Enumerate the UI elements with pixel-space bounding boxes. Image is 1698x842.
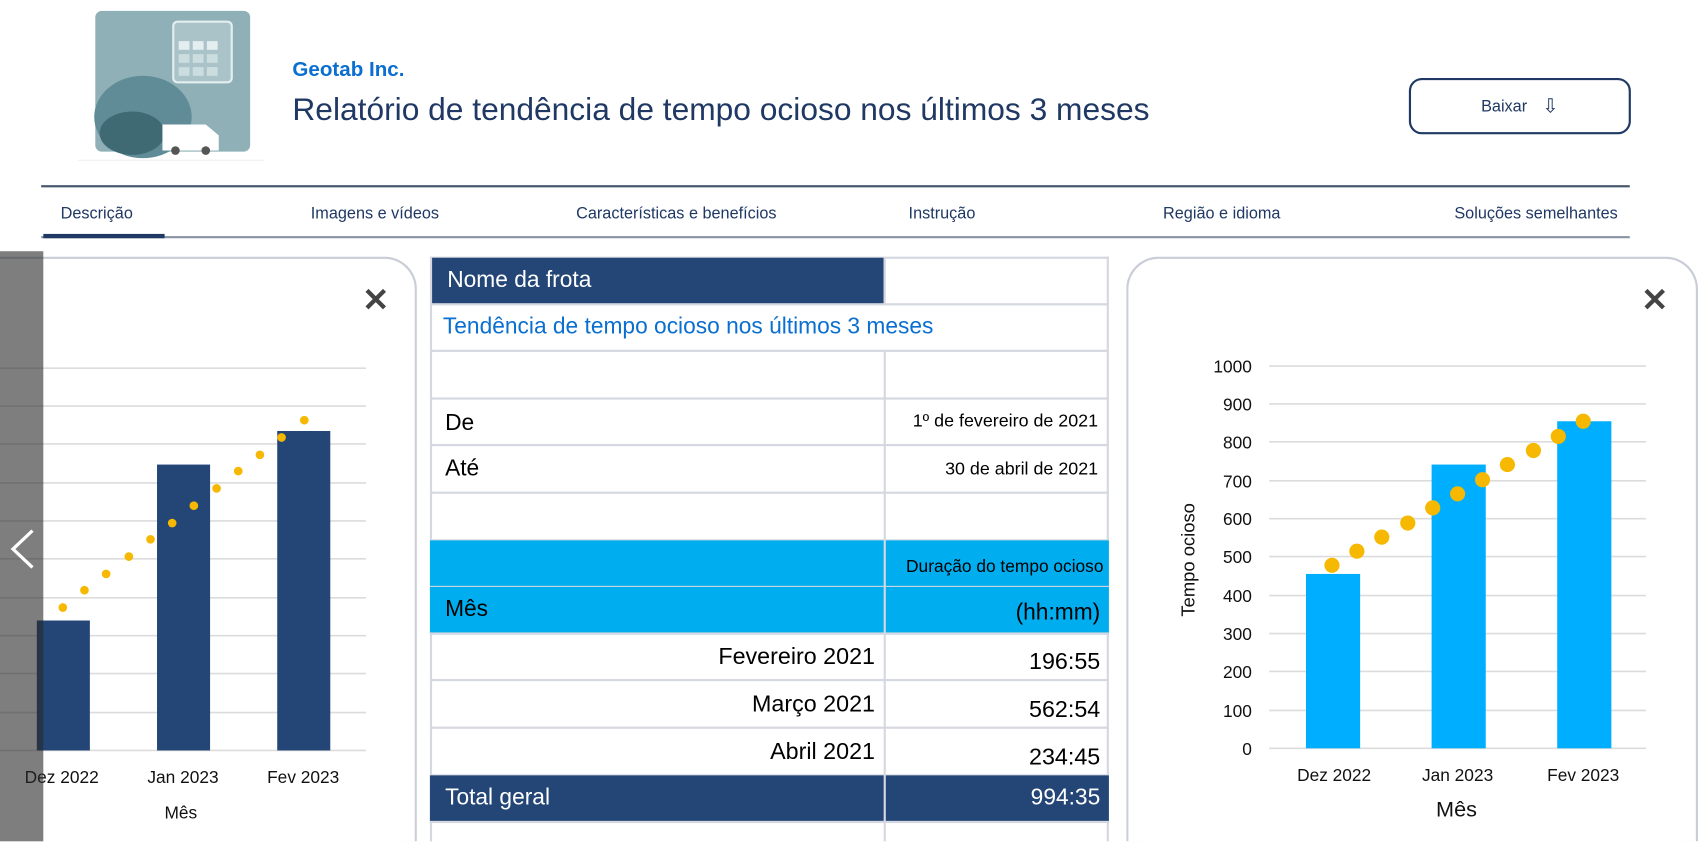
text: 562:54 [1029, 696, 1100, 722]
text: Mês [445, 597, 488, 622]
panel: right chart: 300 [1223, 624, 1252, 644]
panel: left chart [0, 257, 417, 841]
text: 196:55 [1029, 648, 1100, 674]
panel: left chart: Jan 2023 [147, 767, 219, 787]
text: Total geral [445, 785, 550, 810]
text: Março 2021 [752, 690, 875, 716]
panel: right chart: 900 [1223, 394, 1252, 414]
tabs: Características e benefícios [576, 205, 777, 223]
panel: right chart: 500 [1223, 547, 1252, 567]
tabs: Instrução [909, 205, 975, 223]
text: Fevereiro 2021 [718, 643, 875, 669]
table [430, 257, 1109, 841]
panel: right chart: 0 [1242, 739, 1252, 759]
text: 1º de fevereiro de 2021 [913, 411, 1098, 430]
tabs: Descrição [61, 205, 133, 223]
panel: right chart: 200 [1223, 662, 1252, 682]
text: Até [445, 456, 479, 481]
text: (hh:mm) [1016, 600, 1100, 625]
panel: right chart: 400 [1223, 586, 1252, 606]
text: 30 de abril de 2021 [945, 459, 1098, 478]
panel: left chart: ✕ [362, 282, 389, 318]
panel: right chart: 100 [1223, 701, 1252, 721]
panel: right chart: Mês [1436, 797, 1477, 822]
tabs: Imagens e vídeos [311, 205, 439, 223]
scroll arrow overlay [0, 251, 43, 841]
panel: right chart: 600 [1223, 509, 1252, 529]
logo [78, 10, 264, 161]
panel: right chart [1126, 257, 1698, 841]
panel: left chart: Mês [164, 803, 198, 823]
text: De [445, 410, 474, 435]
panel: right chart: ✕ [1641, 282, 1668, 318]
company name: Geotab Inc. [292, 58, 404, 81]
panel: right chart: 1000 [1213, 357, 1252, 377]
panel: right chart: Jan 2023 [1422, 765, 1493, 785]
tabs [41, 205, 1630, 238]
text: 234:45 [1029, 743, 1100, 769]
download button [1409, 78, 1631, 134]
text: Abril 2021 [770, 738, 875, 764]
panel: right chart: Tempo ocioso [1177, 503, 1198, 617]
panel: left chart: Fev 2023 [267, 767, 339, 787]
panel: right chart: Dez 2022 [1297, 765, 1371, 785]
text: Duração do tempo ocioso [906, 558, 1103, 576]
title: Relatório de tendência de tempo ocioso nos últimos 3 meses [292, 92, 1149, 128]
panel: right chart: 800 [1223, 432, 1252, 452]
panel: right chart: Fev 2023 [1547, 765, 1619, 785]
text: Nome da frota [447, 267, 591, 292]
panel: left chart: Dez 2022 [25, 767, 99, 787]
tabs: Região e idioma [1163, 205, 1280, 223]
text: Tendência de tempo ocioso nos últimos 3 meses [443, 314, 933, 339]
download button: ⇩ [1542, 95, 1559, 116]
panel: right chart: 700 [1223, 471, 1252, 491]
text: 994:35 [1031, 785, 1100, 810]
tabs: Soluções semelhantes [1454, 205, 1618, 223]
download button: Baixar [1481, 97, 1527, 115]
